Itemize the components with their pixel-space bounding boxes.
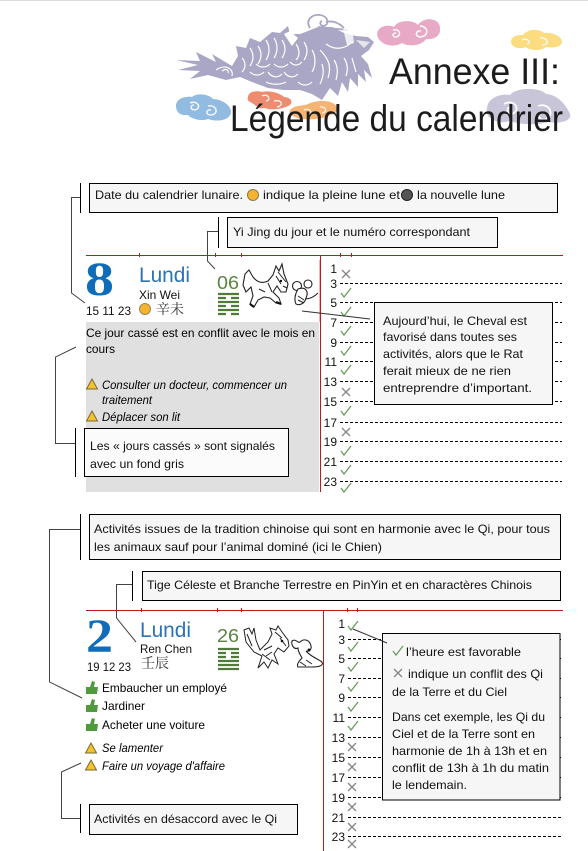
warning activities: first day bbox=[86, 378, 287, 424]
callout: heure favorable et conflit: Dans cet exemple, les Qi du bbox=[392, 710, 545, 724]
hour grid: first day: 19 bbox=[324, 435, 337, 449]
day header: Lundi 8: 8 bbox=[85, 253, 114, 306]
callout: date lunaire bbox=[72, 183, 558, 303]
hour grid: second day bbox=[332, 617, 561, 848]
callout: activités en désaccord bbox=[62, 763, 298, 834]
warning activities: first day: traitement bbox=[102, 393, 153, 407]
hour grid: second day: 17 bbox=[332, 771, 345, 785]
hour grid: first day: 15 bbox=[324, 395, 337, 409]
callout: activités en harmonie: les animaux sauf pour l’animal dominé (ici le Chien) bbox=[94, 540, 382, 554]
hour grid: second day: 9 bbox=[338, 691, 345, 705]
icon: dragon drawing bbox=[244, 626, 289, 668]
calendar rules: second day bbox=[86, 608, 563, 851]
hour grid: first day: 23 bbox=[324, 475, 337, 489]
icon: lavender cloud bbox=[487, 89, 570, 124]
hexagram 06 bbox=[217, 273, 239, 314]
hour grid: second day: 21 bbox=[332, 811, 345, 825]
warning activities: second day: Faire un voyage d'affaire bbox=[102, 759, 225, 773]
callout: activités en harmonie: Activités issues de la tradition chinoise qui sont en harmonie avec le Qi, pour tous bbox=[94, 522, 550, 536]
callout: tige céleste bbox=[116, 571, 560, 642]
hour grid: first day: 1 bbox=[330, 262, 337, 276]
callout: jours cassés: Les « jours cassés » sont signalés bbox=[90, 439, 275, 453]
icon: rat bbox=[292, 280, 318, 305]
callout: heure favorable et conflit: indique un conflit des Qi bbox=[408, 667, 543, 681]
calendar rules: first day bbox=[86, 253, 563, 492]
hour grid: first day: 9 bbox=[330, 336, 337, 350]
callout: heure favorable et conflit bbox=[353, 629, 560, 800]
hour grid: first day: 5 bbox=[330, 296, 337, 310]
day header: Lundi 8: Xin Wei bbox=[139, 288, 180, 302]
hour grid: first day bbox=[324, 262, 562, 492]
day header: Lundi 2: 壬辰 bbox=[141, 653, 169, 673]
hour grid: first day: 21 bbox=[324, 455, 337, 469]
icon: pink cloud bbox=[377, 19, 440, 46]
day header: Lundi 8: 辛未 bbox=[156, 299, 184, 319]
title bbox=[230, 51, 563, 139]
warning activities: second day bbox=[86, 741, 225, 773]
hour grid: second day: 7 bbox=[338, 672, 345, 686]
hour grid: first day: 3 bbox=[330, 277, 337, 291]
hexagram 06: 06 bbox=[217, 273, 239, 293]
hexagram 26: 26 bbox=[217, 626, 239, 646]
hour grid: second day: 11 bbox=[333, 711, 345, 725]
icon: blue cloud bbox=[176, 94, 231, 121]
favourable activities: second day bbox=[86, 681, 227, 732]
day header: Lundi 8 bbox=[85, 253, 190, 319]
day header: Lundi 2: 2 bbox=[86, 610, 113, 663]
hour grid: first day: 17 bbox=[324, 416, 337, 430]
icon: yellow cloud bbox=[511, 30, 562, 50]
hour grid: first day: 11 bbox=[325, 355, 337, 369]
callout: jours cassés bbox=[56, 347, 288, 477]
hour grid: second day: 19 bbox=[332, 791, 345, 805]
hour grid: second day: 13 bbox=[332, 731, 345, 745]
callout: Yi Jing: Yi Jing du jour et le numéro correspondant bbox=[233, 225, 471, 239]
warning activities: first day: Consulter un docteur, commencer un bbox=[102, 378, 287, 392]
favourable activities: second day: Jardiner bbox=[102, 699, 145, 713]
callout: heure favorable et conflit: Ciel et de la Terre sont en bbox=[392, 727, 535, 741]
day header: Lundi 2 bbox=[86, 610, 192, 674]
callout: Yi Jing bbox=[208, 217, 498, 269]
day header: Lundi 2: Ren Chen bbox=[140, 642, 192, 656]
callout: heure favorable et conflit: le lendemain. bbox=[392, 778, 467, 792]
callout: cheval et rat: entreprendre d’important. bbox=[383, 381, 532, 395]
icon: orange cloud bbox=[289, 101, 337, 119]
header illustration: dragon and clouds bbox=[176, 15, 570, 124]
text: jour cassé: cours bbox=[86, 342, 115, 356]
hexagram 26 bbox=[217, 626, 239, 669]
callout: date lunaire: indique la pleine lune et bbox=[263, 188, 401, 202]
icon: dragon bbox=[176, 15, 374, 100]
hour grid: second day: 3 bbox=[338, 633, 345, 647]
panel: jour cassé background bbox=[86, 322, 319, 492]
warning activities: first day: Déplacer son lit bbox=[102, 410, 181, 424]
callout: cheval et rat: favorisé dans toutes ses bbox=[383, 330, 517, 344]
title: Annexe III: bbox=[389, 51, 560, 92]
callout: cheval et rat: activités, alors que le Rat bbox=[383, 347, 524, 361]
day header: Lundi 2: 19 12 23 bbox=[87, 660, 131, 674]
hour grid: first day: 13 bbox=[324, 375, 337, 389]
hour grid: second day: 1 bbox=[338, 617, 345, 631]
callout: heure favorable et conflit: conflit de 13h à 1h du matin bbox=[392, 761, 549, 775]
callout: cheval et rat bbox=[302, 302, 552, 404]
day header: Lundi 8: 15 11 23 bbox=[86, 304, 131, 318]
callout: cheval et rat: Aujourd’hui, le Cheval est bbox=[383, 314, 528, 328]
hour grid: second day: 15 bbox=[332, 751, 345, 765]
day header: Lundi 2: Lundi bbox=[140, 619, 191, 642]
title: Légende du calendrier bbox=[230, 98, 563, 139]
icon: red cloud bbox=[248, 91, 291, 109]
day header: Lundi 8: Lundi bbox=[139, 264, 190, 287]
callout: activités en désaccord: Activités en désaccord avec le Qi bbox=[94, 812, 277, 826]
callout: date lunaire: la nouvelle lune bbox=[417, 188, 505, 202]
callout: date lunaire: Date du calendrier lunaire. bbox=[95, 188, 243, 202]
text: jour cassé bbox=[86, 326, 315, 356]
icon: dog bbox=[292, 640, 322, 667]
callout: heure favorable et conflit: harmonie de 1h à 13h et en bbox=[392, 744, 547, 758]
favourable activities: second day: Embaucher un employé bbox=[102, 681, 227, 695]
callout: heure favorable et conflit: l’heure est favorable bbox=[406, 645, 521, 659]
favourable activities: second day: Acheter une voiture bbox=[102, 718, 205, 732]
text: jour cassé: Ce jour cassé est en conflit avec le mois en bbox=[86, 326, 315, 340]
hour grid: first day: 7 bbox=[330, 316, 337, 330]
hour grid: second day: 23 bbox=[332, 830, 345, 844]
callout: heure favorable et conflit: de la Terre et du Ciel bbox=[392, 685, 507, 699]
icon: horse bbox=[243, 264, 288, 307]
callout: tige céleste: Tige Céleste et Branche Terrestre en PinYin et en charactères Chinois bbox=[147, 578, 532, 592]
callout: cheval et rat: ferait mieux de ne rien bbox=[383, 364, 511, 378]
warning activities: second day: Se lamenter bbox=[102, 741, 164, 755]
callout: jours cassés: avec un fond gris bbox=[90, 457, 184, 471]
callout: activités en harmonie bbox=[50, 514, 560, 698]
hour grid: second day: 5 bbox=[338, 652, 345, 666]
